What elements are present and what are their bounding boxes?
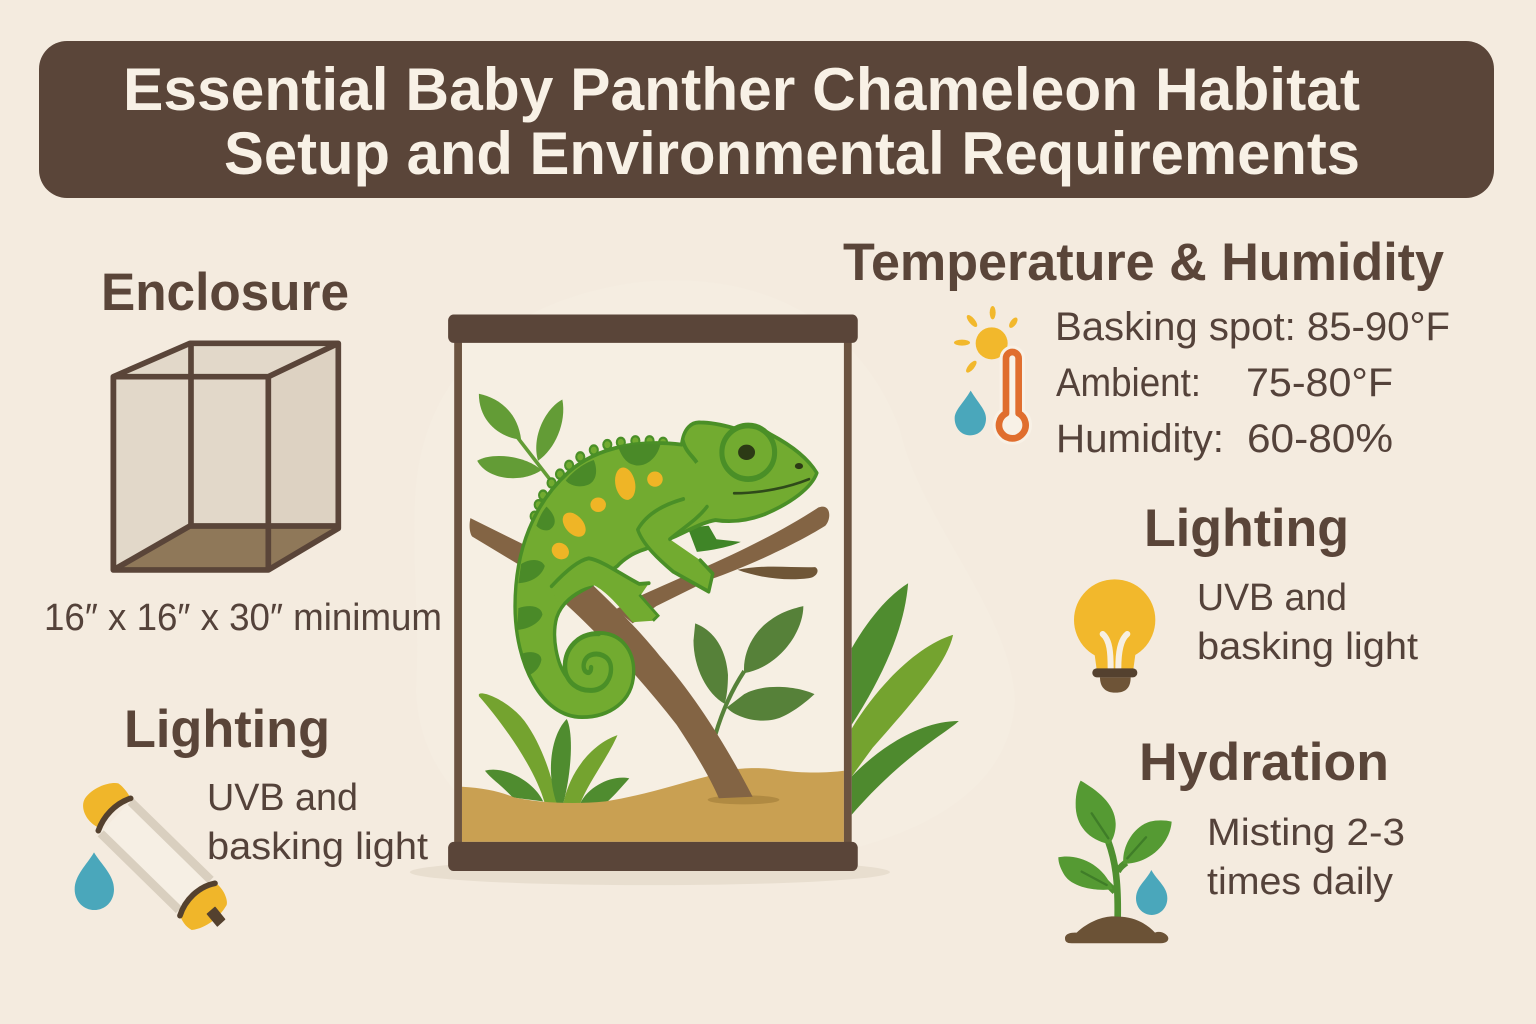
lighting text left: UVB and [207, 777, 358, 819]
title: Essential Baby Panther Chameleon Habitat [123, 56, 1360, 123]
central terrarium illustration [410, 315, 959, 885]
lighting text left: basking light [207, 826, 428, 868]
icon: sun, thermometer, drop [954, 306, 1026, 438]
ground plant [479, 693, 629, 803]
mouth [734, 479, 809, 493]
temperature values: Humidity: [1056, 417, 1224, 461]
panel: enclosure [44, 263, 442, 639]
body and head [515, 422, 817, 717]
panel: lighting left [75, 700, 428, 930]
lighting text right: basking light [1197, 626, 1418, 668]
dark leaf plant [694, 606, 815, 734]
hydration text: Misting 2-3 [1207, 812, 1405, 854]
tank frame [448, 315, 858, 871]
temperature values: Ambient: [1056, 361, 1201, 405]
icon: UVB tube and water drop [75, 783, 227, 930]
heading: temperature and humidity: Temperature & Humidity [843, 233, 1445, 292]
heading: enclosure: Enclosure [101, 263, 349, 322]
front leg [638, 499, 713, 592]
temperature values [1055, 305, 1450, 461]
temperature values: Basking spot: 85-90°F [1055, 305, 1450, 349]
crest [530, 436, 667, 532]
tank interior [462, 343, 844, 842]
panel: hydration [1058, 733, 1405, 943]
enclosure size text: 16″ x 16″ x 30″ minimum [44, 597, 442, 639]
panel: temperature and humidity [843, 233, 1450, 461]
hydration text: times daily [1207, 861, 1393, 903]
icon: seedling with drop [1058, 781, 1172, 943]
plant outside tank [852, 583, 959, 815]
icon: glass enclosure cube [113, 343, 338, 570]
title: Setup and Environmental Requirements [224, 120, 1360, 187]
branches [470, 507, 829, 804]
lighting text right: UVB and [1197, 577, 1347, 619]
eye [722, 426, 775, 479]
icon: light bulb [1074, 579, 1155, 693]
sand substrate [462, 768, 844, 842]
hind leg [552, 558, 658, 622]
heading: hydration: Hydration [1139, 733, 1389, 792]
chameleon [515, 422, 817, 717]
nostril [795, 463, 803, 469]
top-left leaves [477, 394, 563, 484]
heading: lighting: Lighting [1144, 499, 1349, 558]
dark body patches [517, 444, 660, 676]
heading: lighting: Lighting [124, 700, 330, 759]
panel: lighting right [1074, 499, 1418, 693]
floor shadow [410, 859, 890, 885]
temperature values: 75-80°F [1246, 361, 1393, 405]
yellow spots [550, 465, 663, 562]
temperature values: 60-80% [1247, 417, 1393, 461]
casque line [683, 440, 697, 463]
title banner [39, 41, 1494, 198]
tail spiral [565, 634, 611, 690]
far leg of chameleon [688, 526, 741, 552]
